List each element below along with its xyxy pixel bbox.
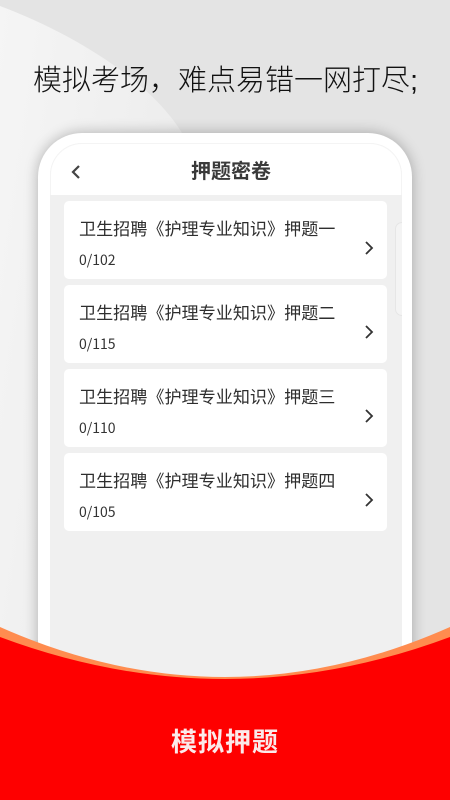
card 1: 0/102 xyxy=(79,250,116,270)
card 3: 卫生招聘《护理专业知识》押题三 xyxy=(79,383,335,408)
card 3 xyxy=(64,369,387,447)
phone screen xyxy=(50,143,402,733)
icon: chevron xyxy=(365,493,374,507)
card 2: 0/115 xyxy=(79,334,116,354)
footer label: 模拟押题 xyxy=(171,727,279,757)
title: 模拟考场，难点易错一网打尽; xyxy=(33,65,418,97)
icon: chevron xyxy=(365,241,374,255)
card 2 xyxy=(64,285,387,363)
card 1 xyxy=(64,201,387,279)
card 1: 卫生招聘《护理专业知识》押题一 xyxy=(79,215,335,240)
card 4 xyxy=(64,453,387,531)
red footer wave xyxy=(0,627,450,800)
card 4: 卫生招聘《护理专业知识》押题四 xyxy=(79,467,335,492)
screen header xyxy=(50,143,402,195)
card 3: 0/110 xyxy=(79,418,116,438)
side tab xyxy=(395,222,402,316)
icon: back arrow xyxy=(72,165,80,179)
icon: chevron xyxy=(365,325,374,339)
card 2: 卫生招聘《护理专业知识》押题二 xyxy=(79,299,335,324)
icon: chevron xyxy=(365,409,374,423)
card 4: 0/105 xyxy=(79,502,116,522)
phone mockup xyxy=(38,133,412,733)
screen title: 押题密卷 xyxy=(191,161,271,183)
